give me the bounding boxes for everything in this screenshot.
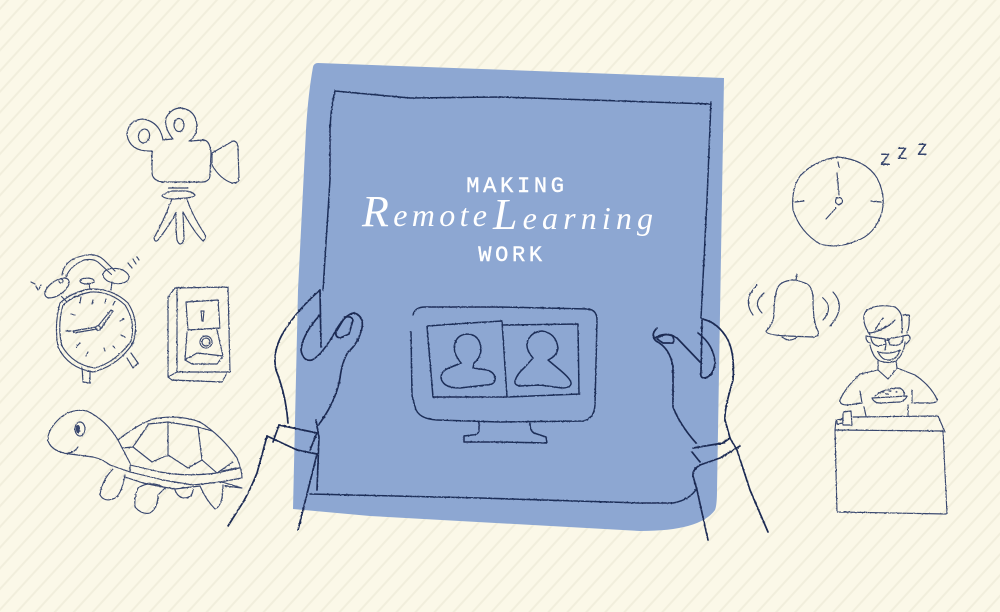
camera body xyxy=(152,140,211,182)
title script: remote: Remote xyxy=(361,187,487,236)
portrait: left participant xyxy=(441,334,495,388)
portrait: right participant xyxy=(515,331,571,388)
blue book cover xyxy=(293,63,724,531)
turtle legs xyxy=(100,469,125,500)
bell ringing waves xyxy=(748,285,839,326)
clock bells and handle xyxy=(42,274,72,302)
icon: turtle xyxy=(48,410,242,513)
right hand holding the book xyxy=(653,319,768,540)
turtle shell xyxy=(118,417,242,485)
title xyxy=(361,174,653,268)
icon: ringing bell xyxy=(748,274,839,340)
sleeping z letters: zzz xyxy=(880,137,928,170)
title line: making: MAKING xyxy=(466,174,568,199)
panel: sketched inner frame of the cover xyxy=(310,91,711,503)
person face xyxy=(870,342,905,362)
switch rocker xyxy=(186,300,220,330)
turtle eye xyxy=(75,422,85,436)
icon: alarm clock xyxy=(31,255,139,383)
mug xyxy=(837,411,852,425)
tripod xyxy=(168,187,188,189)
icon: wall clock with zzz xyxy=(793,137,928,246)
clock feet xyxy=(82,367,90,383)
person glasses xyxy=(866,335,908,346)
monitor stand xyxy=(464,422,547,443)
person torso and arms xyxy=(878,361,897,379)
turtle head and neck xyxy=(48,410,130,472)
left hand holding the book xyxy=(228,290,362,530)
clock marks and hands xyxy=(795,162,881,202)
camera reels xyxy=(127,119,163,151)
camera lens xyxy=(212,141,239,183)
icon: film camera on tripod xyxy=(127,108,239,244)
person hair xyxy=(864,306,902,335)
title script: learning: Learning xyxy=(492,190,653,239)
food bowl xyxy=(872,396,907,403)
clock ringing marks xyxy=(31,257,139,290)
desk xyxy=(853,416,945,432)
clock body xyxy=(56,289,136,372)
icon: smiling person at desk with food xyxy=(835,306,947,514)
clock ticks xyxy=(66,297,125,356)
icon: computer monitor with two video call portraits xyxy=(411,307,597,443)
title line: work: WORK xyxy=(478,243,546,268)
clock hands xyxy=(98,310,113,330)
icon: light switch xyxy=(168,287,230,382)
